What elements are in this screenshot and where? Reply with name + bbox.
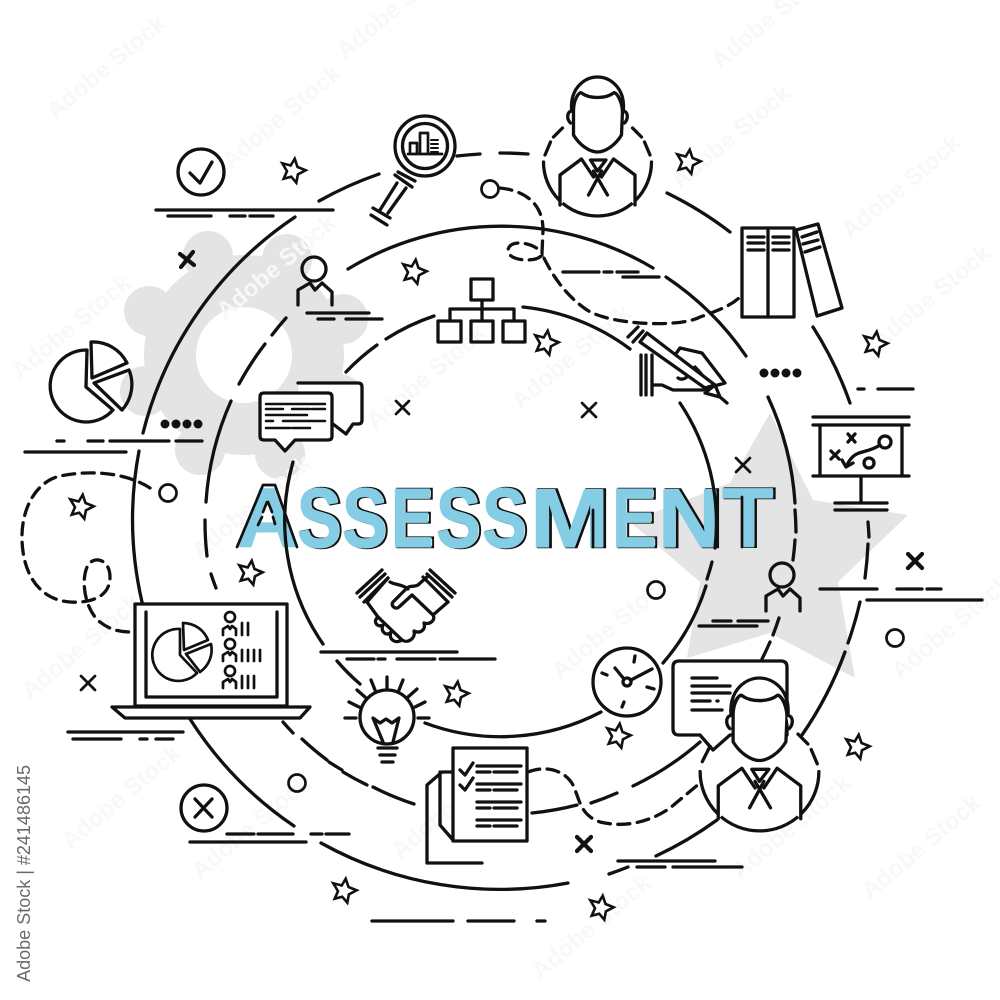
watermark pattern: Adobe Stock xyxy=(867,239,997,355)
icon: small person, lower xyxy=(766,563,800,611)
icon: books xyxy=(742,224,842,317)
watermark pattern: Adobe Stock xyxy=(727,769,857,885)
watermark pattern: Adobe Stock xyxy=(527,869,657,985)
watermark pattern: Adobe Stock xyxy=(7,269,137,385)
title: ASSESSMENT: N xyxy=(660,472,724,566)
icon: speech bubble xyxy=(673,661,787,750)
title: ASSESSMENT: N xyxy=(658,472,722,566)
title: ASSESSMENT: S xyxy=(297,472,341,566)
laptop people rows xyxy=(223,612,260,688)
title: ASSESSMENT: S xyxy=(484,472,529,566)
title: ASSESSMENT: S xyxy=(436,472,481,566)
icon: clock xyxy=(593,648,661,716)
icon: org chart xyxy=(438,279,525,342)
icon: magnifier with chart xyxy=(371,116,455,225)
outer ring xyxy=(133,153,869,889)
title: ASSESSMENT: S xyxy=(482,472,527,566)
icon: presentation board xyxy=(813,417,909,510)
watermark pattern: Adobe Stock xyxy=(212,209,342,325)
watermark pattern: Adobe Stock xyxy=(837,129,967,245)
watermark pattern: Adobe Stock xyxy=(857,789,987,905)
title: ASSESSMENT: S xyxy=(438,472,483,566)
stars xyxy=(70,150,888,920)
title: ASSESSMENT: S xyxy=(344,472,389,566)
icon: light bulb xyxy=(345,677,429,762)
title: ASSESSMENT: A xyxy=(237,471,297,565)
dashed path: bottom xyxy=(528,769,700,824)
title: ASSESSMENT: S xyxy=(299,472,343,566)
icon: cross circle xyxy=(181,785,227,831)
inner ring xyxy=(285,307,716,737)
icon: documents with checklist xyxy=(427,748,527,863)
cross marks xyxy=(81,252,922,851)
middle ring xyxy=(205,226,796,813)
icon: pen and hand xyxy=(628,327,727,403)
watermark pattern: Adobe Stock xyxy=(57,739,187,855)
watermark pattern: Adobe Stock xyxy=(507,299,637,415)
laptop pie chart xyxy=(152,623,212,681)
watermark pattern: Adobe Stock xyxy=(17,589,147,705)
watermark pattern: Adobe Stock xyxy=(362,319,492,435)
dashed path: top right loop xyxy=(500,188,741,324)
icon: person in circle, bottom xyxy=(700,678,819,831)
icon: laptop xyxy=(112,604,310,718)
title: ASSESSMENT: E xyxy=(391,470,434,565)
title: ASSESSMENT: E xyxy=(614,472,659,566)
watermark pattern: Adobe Stock xyxy=(187,449,317,565)
watermark pattern: Adobe Stock xyxy=(547,569,677,685)
title: ASSESSMENT: M xyxy=(532,471,611,565)
title: ASSESSMENT: M xyxy=(530,471,609,565)
watermark pattern: Adobe Stock xyxy=(667,79,797,195)
title: ASSESSMENT: E xyxy=(612,472,657,566)
title: ASSESSMENT: E xyxy=(393,470,436,565)
icon: check circle xyxy=(178,149,224,195)
horizontal accent lines xyxy=(25,210,982,921)
dashed path: left loop xyxy=(22,473,150,632)
icon: small person, upper xyxy=(298,257,332,305)
title: ASSESSMENT: S xyxy=(342,472,387,566)
watermark pattern: Adobe Stock xyxy=(217,59,347,175)
icon: handshake xyxy=(357,570,455,642)
background star xyxy=(630,413,908,678)
title: ASSESSMENT xyxy=(237,470,775,566)
title: ASSESSMENT: T xyxy=(722,471,773,565)
watermark pattern: Adobe Stock xyxy=(187,769,317,885)
watermark pattern: Adobe Stock xyxy=(387,749,517,865)
watermark pattern: Adobe Stock xyxy=(42,9,172,125)
background gear xyxy=(120,231,368,479)
icon: pie chart xyxy=(50,342,132,422)
small circles xyxy=(160,180,904,792)
icon: chat bubbles xyxy=(260,383,362,451)
title: ASSESSMENT: T xyxy=(724,471,775,565)
icon: person in circle, top xyxy=(544,77,652,216)
vertical stock id text: Adobe Stock | #241486145 xyxy=(14,765,34,982)
dots xyxy=(160,368,802,428)
